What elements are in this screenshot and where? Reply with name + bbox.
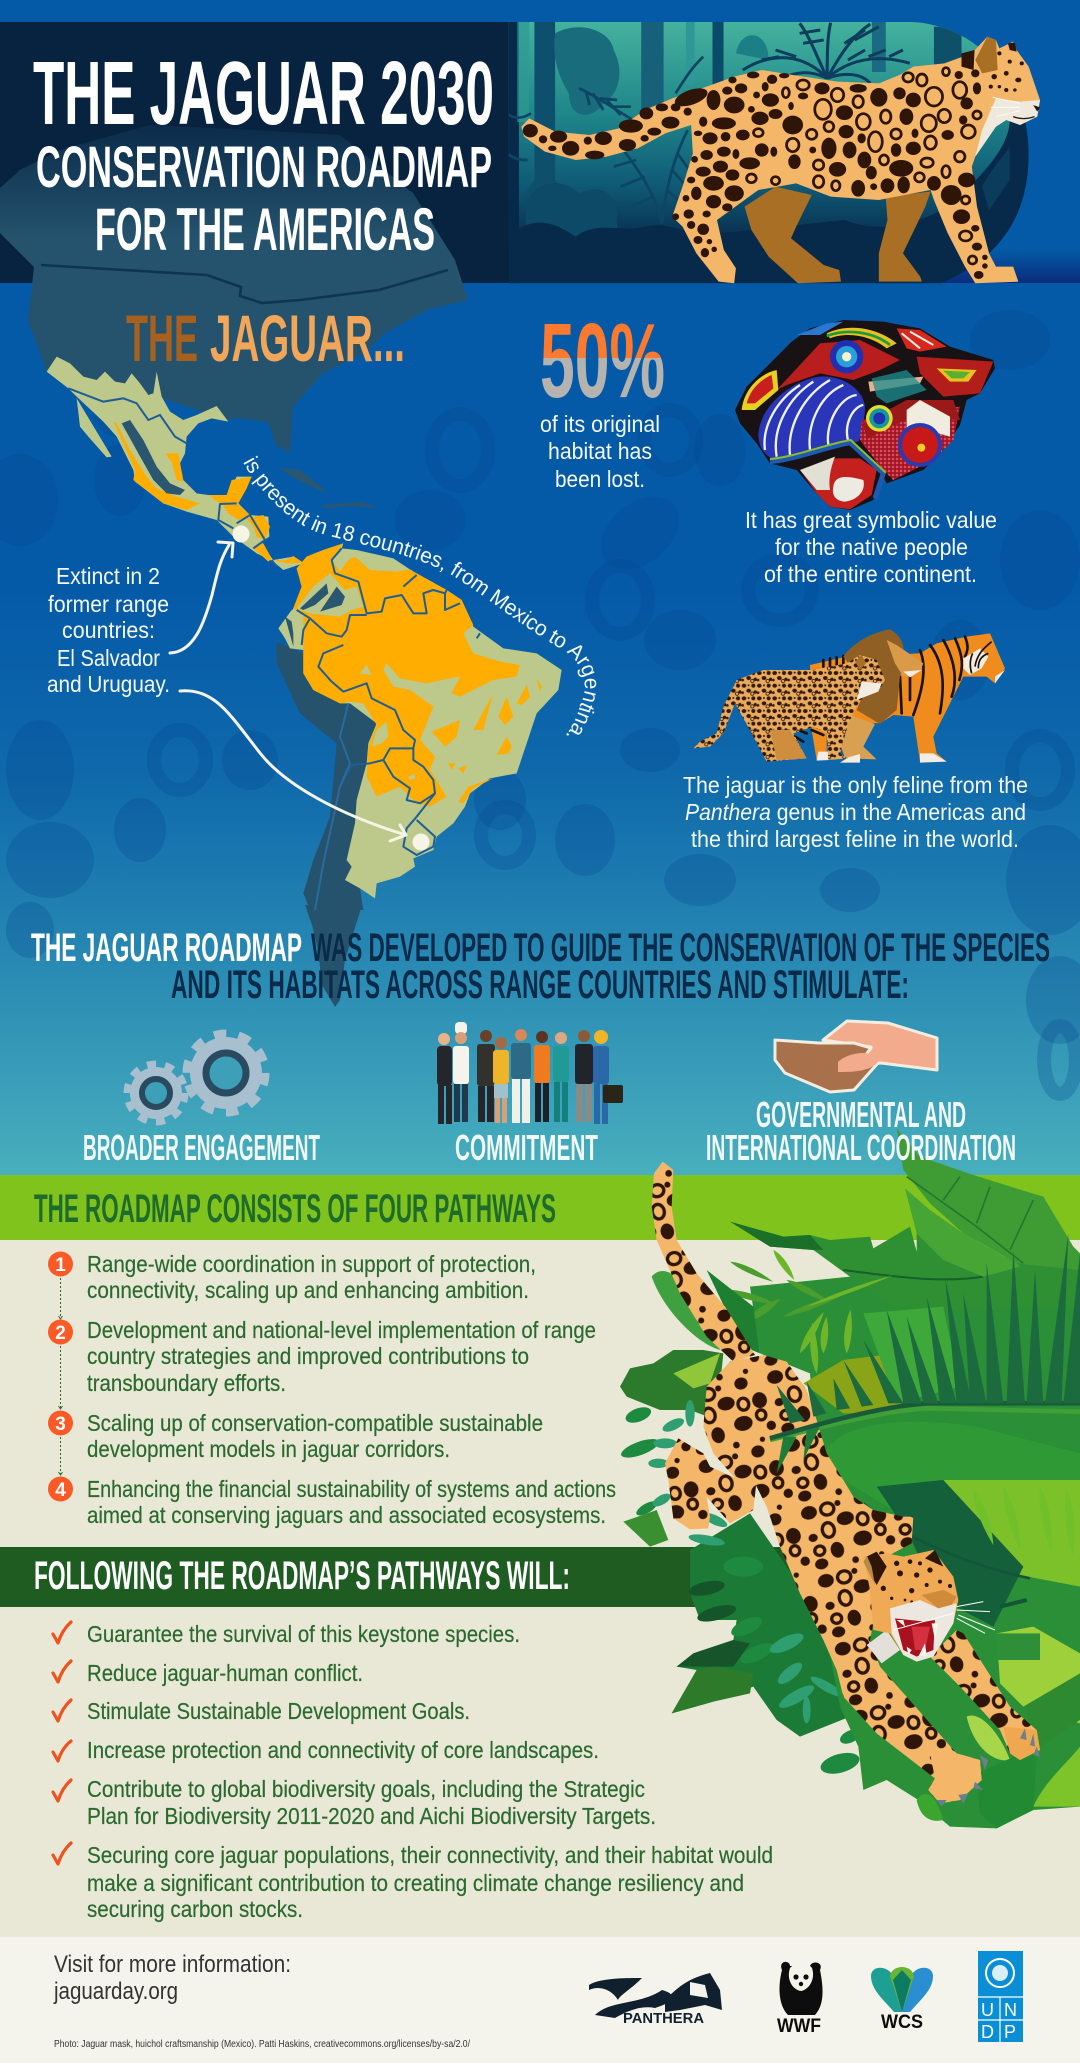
heading: four pathways: THE ROADMAP CONSISTS OF FOUR PATHWAYS bbox=[34, 1187, 556, 1231]
text: habitat lost: been lost. bbox=[555, 466, 645, 492]
logo: UNDP: P bbox=[1004, 2022, 1016, 2042]
illustration: jaguar, lion and tiger bbox=[693, 629, 1005, 763]
item 4: 4 bbox=[55, 1480, 66, 1501]
text: more information bbox=[53, 1951, 291, 2005]
heading: the jaguar: JAGUAR... bbox=[210, 301, 405, 375]
text: extinct countries: former range bbox=[48, 591, 169, 617]
logo: WWF: WWF bbox=[777, 2016, 821, 2037]
list: benefits: Guarantee the survival of this keystone species. bbox=[87, 1621, 520, 1647]
jaguar illustration: header bbox=[521, 37, 1040, 283]
item 2: transboundary efforts. bbox=[87, 1370, 286, 1396]
text: habitat lost: habitat has bbox=[548, 438, 652, 464]
background: blue gradient bbox=[0, 0, 1080, 1176]
map: South America with jaguar range bbox=[278, 543, 562, 910]
curved text: range statement: is present in 18 countries, from Mexico to Argentina. bbox=[244, 456, 596, 736]
item 4 bbox=[48, 1476, 616, 1528]
list: benefits: Contribute to global biodiversity goals, including the Strategic bbox=[87, 1776, 645, 1802]
logo: UNDP: U bbox=[981, 2000, 994, 2020]
title: CONSERVATION ROADMAP bbox=[36, 135, 492, 200]
list: benefits: Stimulate Sustainable Development Goals. bbox=[87, 1698, 470, 1724]
list: benefits: securing carbon stocks. bbox=[87, 1896, 303, 1922]
item 1 bbox=[48, 1251, 536, 1303]
logo: WCS: WCS bbox=[881, 2012, 923, 2033]
map: Mexico and Central America bbox=[47, 357, 303, 570]
text: only panthera feline: the third largest feline in the world. bbox=[691, 826, 1019, 852]
list: benefits: Securing core jaguar populations, their connectivity, and their habitat would bbox=[87, 1842, 773, 1868]
list: benefits: Plan for Biodiversity 2011-2020 and Aichi Biodiversity Targets. bbox=[87, 1803, 656, 1829]
arrows: extinct range callouts bbox=[170, 542, 406, 841]
logo: Panthera bbox=[589, 1973, 722, 2027]
background: jaguar rosette pattern bbox=[0, 310, 1080, 1044]
image: huichol jaguar mask bbox=[735, 320, 995, 510]
text: symbolic value bbox=[745, 507, 997, 587]
title bbox=[33, 44, 494, 263]
text: more information: Visit for more information: bbox=[54, 1951, 291, 1978]
text: extinct countries: countries: bbox=[62, 617, 155, 643]
text: only panthera feline: The jaguar is the only feline from the bbox=[683, 772, 1028, 798]
illustration: arching palm frond bbox=[770, 1233, 1080, 1473]
text: photo credit: Photo: Jaguar mask, huichol craftsmanship (Mexico). Patti Haskins, creativecommons.org/licenses/by-sa/2.0/ bbox=[54, 2039, 470, 2050]
heading: the jaguar bbox=[126, 301, 405, 375]
header band bbox=[0, 22, 1080, 283]
heading: following the pathways: FOLLOWING THE ROADMAP’S PATHWAYS WILL: bbox=[34, 1554, 570, 1598]
illustration: tropical foliage bbox=[619, 1128, 1080, 1828]
list: benefits: make a significant contribution to creating climate change resiliency and bbox=[87, 1870, 744, 1896]
logo: Panthera: PANTHERA bbox=[623, 2010, 704, 2027]
item 1: connectivity, scaling up and enhancing ambition. bbox=[87, 1277, 529, 1303]
heading: roadmap purpose bbox=[31, 926, 1050, 1007]
text: only panthera feline bbox=[683, 772, 1028, 852]
icon: diverse group of workers bbox=[437, 1022, 623, 1124]
item 3: Scaling up of conservation-compatible sustainable bbox=[87, 1410, 543, 1436]
item 2: 2 bbox=[55, 1323, 66, 1344]
map: North America bbox=[0, 125, 468, 453]
map: US border line bbox=[41, 265, 448, 303]
label: governmental and international coordination bbox=[706, 1094, 1016, 1168]
item 2 bbox=[48, 1317, 596, 1396]
list: benefits: Increase protection and connectivity of core landscapes. bbox=[87, 1737, 599, 1763]
logo: WWF bbox=[777, 1962, 823, 2037]
text: extinct countries: and Uruguay. bbox=[47, 671, 170, 697]
illustration: crouching jaguar bbox=[652, 1162, 1040, 1807]
logo: UNDP: N bbox=[1004, 2000, 1017, 2020]
item 2: country strategies and improved contributions to bbox=[87, 1343, 529, 1369]
title: THE JAGUAR 2030 bbox=[33, 44, 494, 144]
item 3: development models in jaguar corridors. bbox=[87, 1436, 450, 1462]
map: Caribbean islands bbox=[278, 468, 380, 508]
item 1: 1 bbox=[55, 1255, 66, 1276]
statistic: 50%: 50% bbox=[540, 302, 665, 420]
text: symbolic value: It has great symbolic value bbox=[745, 507, 997, 533]
text: extinct countries: El Salvador bbox=[57, 645, 160, 671]
logo: UNDP bbox=[978, 1951, 1023, 2042]
jungle panel bbox=[500, 22, 1032, 287]
panel: pathways body bbox=[0, 1240, 1080, 1548]
list: benefits: Reduce jaguar-human conflict. bbox=[87, 1660, 363, 1686]
title: FOR THE AMERICAS bbox=[95, 196, 435, 263]
text: symbolic value: of the entire continent. bbox=[764, 561, 977, 587]
panel: benefits body bbox=[0, 1606, 1080, 1938]
label: broader engagement: BROADER ENGAGEMENT bbox=[83, 1127, 320, 1168]
map: Andes dark strip bbox=[277, 642, 377, 1007]
band: following the pathways bbox=[0, 1547, 1080, 1607]
connector: dotted arrows bbox=[58, 1278, 62, 1475]
heading: the jaguar: THE bbox=[126, 301, 198, 375]
icons: orange check marks bbox=[53, 1622, 71, 1864]
icon: clasped hands bbox=[775, 1021, 937, 1092]
background: rosette rings bbox=[154, 410, 1076, 1094]
item 4: Enhancing the financial sustainability of systems and actions bbox=[87, 1476, 616, 1502]
label: commitment: COMMITMENT bbox=[455, 1127, 598, 1168]
logo: WCS bbox=[871, 1967, 933, 2033]
item 2: Development and national-level implementation of range bbox=[87, 1317, 596, 1343]
callout: extinct location markers bbox=[232, 526, 430, 850]
logo: UNDP: D bbox=[981, 2022, 994, 2042]
text: only panthera feline: Panthera genus in the Americas and bbox=[685, 799, 1026, 825]
item 3: 3 bbox=[55, 1414, 66, 1435]
icon: gears bbox=[127, 1034, 265, 1122]
text: habitat lost bbox=[540, 411, 660, 492]
list: four pathways bbox=[48, 1251, 616, 1528]
text: symbolic value: for the native people bbox=[775, 534, 968, 560]
text: extinct countries bbox=[47, 563, 170, 697]
panel: footer bbox=[0, 1937, 1080, 2063]
item 4: aimed at conserving jaguars and associated ecosystems. bbox=[87, 1502, 606, 1528]
list: benefits bbox=[87, 1621, 773, 1922]
text: extinct countries: Extinct in 2 bbox=[56, 563, 160, 589]
text: more information: jaguarday.org bbox=[53, 1978, 178, 2005]
item 1: Range-wide coordination in support of protection, bbox=[87, 1251, 536, 1277]
band: four pathways bbox=[0, 1175, 1080, 1240]
text: habitat lost: of its original bbox=[540, 411, 660, 437]
heading: roadmap purpose: THE JAGUAR ROADMAP bbox=[31, 926, 302, 970]
item 3 bbox=[48, 1410, 543, 1462]
